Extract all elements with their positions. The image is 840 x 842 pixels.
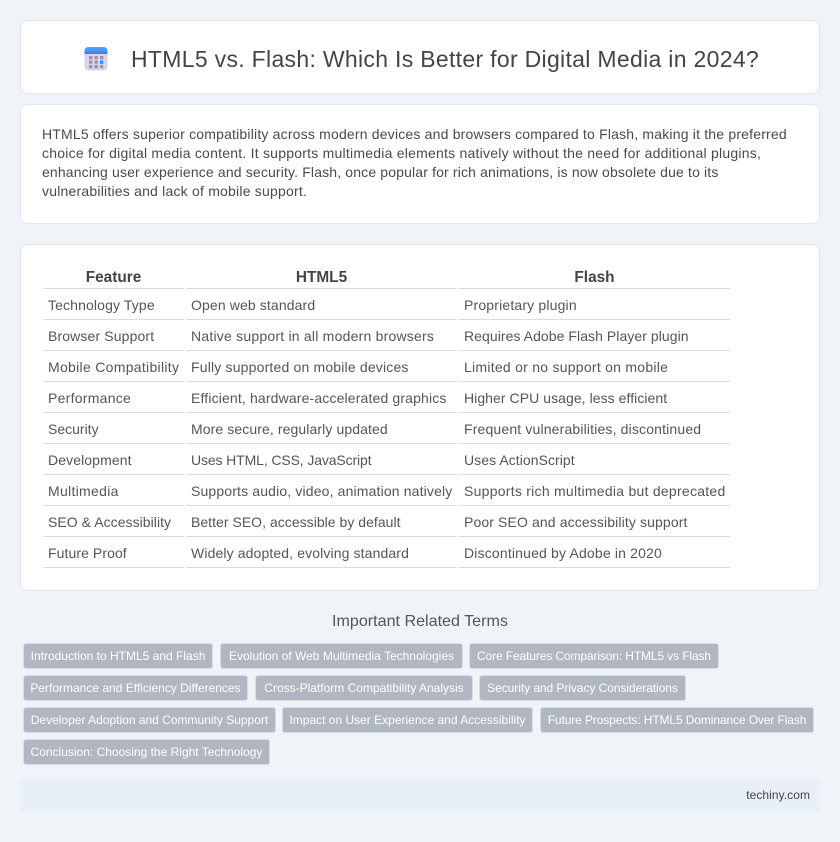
footer text: techiny.com: techiny.com xyxy=(746,788,810,802)
tag xyxy=(255,675,473,701)
tag: Introduction to HTML5 and Flash xyxy=(31,649,205,663)
intro text: choice for digital media content. It supports multimedia elements natively without the need for additional plugins, xyxy=(42,145,761,161)
row: Performance: Efficient, hardware-accelerated graphics xyxy=(191,390,447,406)
row: SEO & Accessibility: Better SEO, accessible by default xyxy=(191,514,401,530)
intro text xyxy=(42,126,787,199)
row: SEO & Accessibility xyxy=(48,514,688,530)
tag xyxy=(479,675,686,701)
row: Security xyxy=(48,421,701,437)
header panel xyxy=(20,20,820,94)
row: Technology Type xyxy=(48,297,577,313)
tag: Security and Privacy Considerations xyxy=(487,681,678,695)
row: SEO & Accessibility: SEO & Accessibility xyxy=(48,514,171,530)
row: Development: Uses ActionScript xyxy=(464,452,575,468)
row: Performance: Higher CPU usage, less efficient xyxy=(464,390,667,406)
row: Browser Support: Requires Adobe Flash Player plugin xyxy=(464,328,689,344)
row: Browser Support: Native support in all modern browsers xyxy=(191,328,434,344)
row: Future Proof: Widely adopted, evolving standard xyxy=(191,545,409,561)
row: Security: Security xyxy=(48,421,99,437)
row: Performance xyxy=(48,390,668,406)
column heading: Feature: Feature xyxy=(86,269,141,286)
tag xyxy=(282,707,533,733)
panel: intro xyxy=(20,104,820,224)
row: Future Proof: Future Proof xyxy=(48,545,127,561)
footer bar xyxy=(20,778,820,812)
title: HTML5 vs. Flash: Which Is Better for Digital Media in 2024? xyxy=(131,46,759,72)
row: Security: Frequent vulnerabilities, discontinued xyxy=(464,421,701,437)
icon: calendar xyxy=(84,47,108,70)
tag: Performance and Efficiency Differences xyxy=(30,681,241,695)
tag xyxy=(469,643,719,669)
row: SEO & Accessibility: Poor SEO and accessibility support xyxy=(464,514,688,530)
intro text: HTML5 offers superior compatibility across modern devices and browsers compared to Flash, making it the preferred xyxy=(42,126,787,142)
intro text: vulnerabilities and lack of mobile support. xyxy=(42,183,307,199)
row: Mobile Compatibility: Mobile Compatibility xyxy=(48,359,179,375)
row: Browser Support: Browser Support xyxy=(48,328,154,344)
row: Multimedia xyxy=(48,483,726,499)
row: Future Proof xyxy=(48,545,662,561)
row: Technology Type: Technology Type xyxy=(48,297,155,313)
row: Multimedia: Multimedia xyxy=(48,483,119,499)
column heading: Flash: Flash xyxy=(574,269,615,286)
row: Mobile Compatibility: Limited or no support on mobile xyxy=(464,359,668,375)
tag: Future Prospects: HTML5 Dominance Over Flash xyxy=(548,713,806,727)
tag xyxy=(23,707,276,733)
row: Mobile Compatibility xyxy=(48,359,668,375)
row: Browser Support xyxy=(48,328,689,344)
row: Security: More secure, regularly updated xyxy=(191,421,388,437)
row: Development xyxy=(48,452,575,468)
tag: Developer Adoption and Community Support xyxy=(31,713,268,727)
tag xyxy=(220,643,463,669)
row: Multimedia: Supports rich multimedia but deprecated xyxy=(464,483,726,499)
tag: Evolution of Web Multimedia Technologies xyxy=(229,649,454,663)
tag: Conclusion: Choosing the Right Technology xyxy=(31,745,262,759)
column heading: HTML5: HTML5 xyxy=(296,269,347,286)
row: Development: Uses HTML, CSS, JavaScript xyxy=(191,452,371,468)
tag xyxy=(540,707,814,733)
row: Technology Type: Proprietary plugin xyxy=(464,297,577,313)
row: Future Proof: Discontinued by Adobe in 2020 xyxy=(464,545,662,561)
tag xyxy=(23,675,248,701)
row: Performance: Performance xyxy=(48,390,131,406)
row: Mobile Compatibility: Fully supported on mobile devices xyxy=(191,359,409,375)
panel: comparison table xyxy=(20,244,820,591)
tag: Core Features Comparison: HTML5 vs Flash xyxy=(477,649,711,663)
tag: Cross-Platform Compatibility Analysis xyxy=(264,681,464,695)
tag xyxy=(23,643,213,669)
intro text: enhancing user experience and security. Flash, once popular for rich animations, is now obsolete due to its xyxy=(42,164,718,180)
tag: Impact on User Experience and Accessibility xyxy=(289,713,526,727)
tag xyxy=(23,739,270,765)
heading: related terms: Important Related Terms xyxy=(332,612,508,630)
row: Development: Development xyxy=(48,452,132,468)
row: Technology Type: Open web standard xyxy=(191,297,315,313)
row: Multimedia: Supports audio, video, animation natively xyxy=(191,483,452,499)
